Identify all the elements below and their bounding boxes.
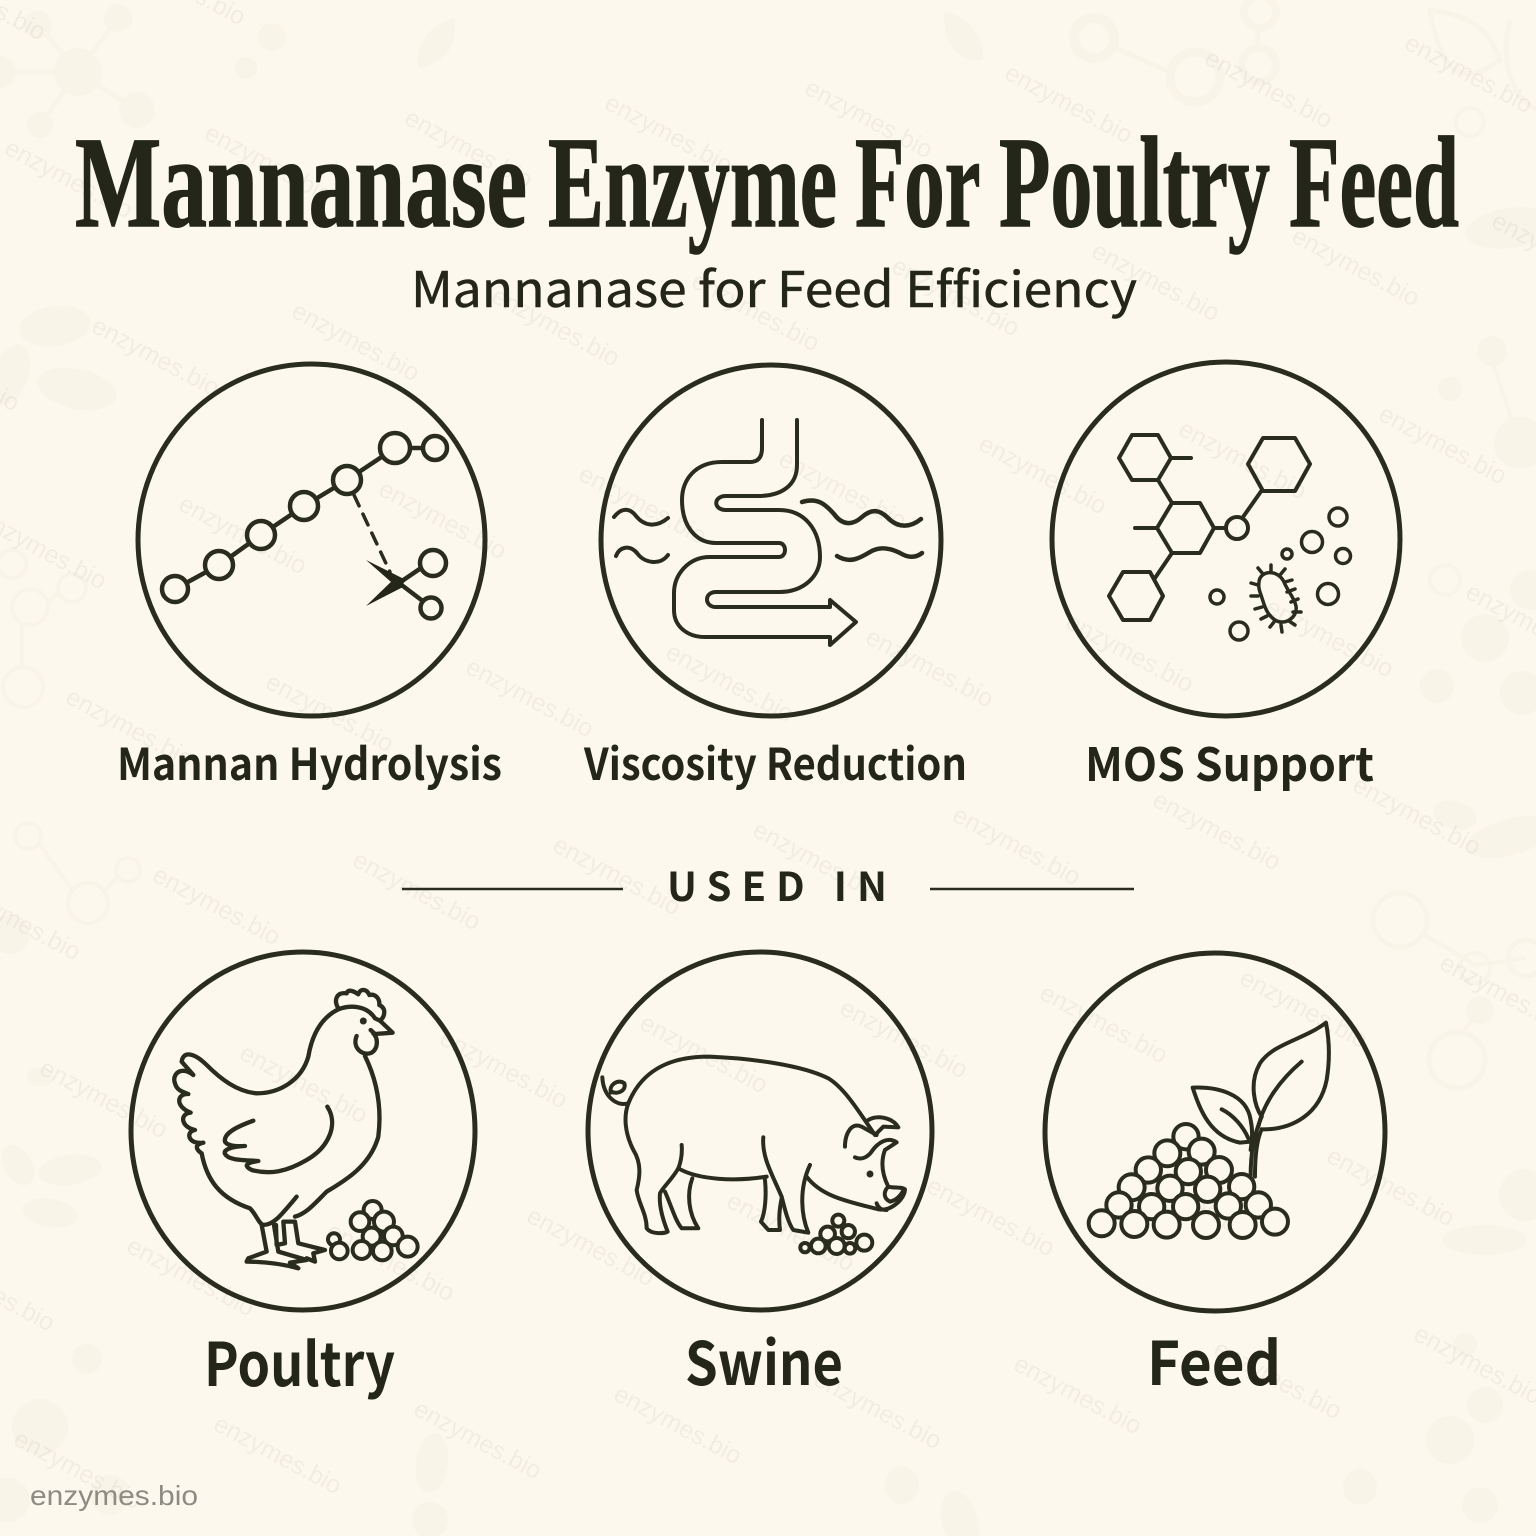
watermark pattern: enzymes.bio — [322, 1217, 459, 1307]
title: Mannanase — [75, 111, 527, 255]
watermark pattern: enzymes.bio — [0, 134, 137, 224]
watermark pattern: enzymes.bio — [348, 846, 485, 936]
icon: hen — [174, 990, 393, 1268]
watermark pattern: enzymes.bio — [1322, 1142, 1459, 1232]
icon: pig — [602, 1057, 905, 1233]
ring — [138, 364, 485, 716]
watermark pattern: enzymes.bio — [1287, 222, 1424, 312]
panel: poultry — [131, 952, 475, 1404]
watermark pattern: enzymes.bio — [400, 104, 537, 194]
watermark pattern: enzymes.bio — [600, 89, 737, 179]
watermark pattern: enzymes.bio — [1000, 59, 1137, 149]
watermark pattern: enzymes.bio — [548, 831, 685, 921]
ring — [1052, 362, 1400, 716]
watermark pattern: enzymes.bio — [748, 816, 885, 906]
watermark pattern: enzymes.bio — [861, 623, 998, 713]
icon: sprouting leaves — [1193, 1023, 1329, 1177]
watermark pattern: enzymes.bio — [522, 1202, 659, 1292]
watermark pattern: enzymes.bio — [35, 1054, 172, 1144]
watermark pattern: enzymes.bio — [61, 683, 198, 773]
panel: feed — [1045, 953, 1385, 1403]
watermark pattern: enzymes.bio — [1200, 44, 1337, 134]
watermark pattern: enzymes.bio — [974, 430, 1111, 520]
watermark pattern: enzymes.bio — [435, 1024, 572, 1114]
watermark pattern: enzymes.bio — [148, 861, 285, 951]
watermark pattern: enzymes.bio — [174, 490, 311, 580]
watermark pattern: enzymes.bio — [1035, 979, 1172, 1069]
watermark pattern: enzymes.bio — [1087, 237, 1224, 327]
watermark pattern: enzymes.bio — [1009, 1350, 1146, 1440]
watermark pattern: enzymes.bio — [887, 252, 1024, 342]
watermark pattern: enzymes.bio — [235, 1039, 372, 1129]
brand footer: enzymes.bio — [30, 1480, 198, 1511]
watermark pattern: enzymes.bio — [409, 1395, 546, 1485]
watermark pattern: enzymes.bio — [122, 1232, 259, 1322]
ring — [588, 952, 932, 1310]
watermark pattern: enzymes.bio — [1174, 415, 1311, 505]
watermark pattern: enzymes.bio — [722, 1187, 859, 1277]
label: Mannan Hydrolysis — [117, 729, 502, 793]
ring — [131, 952, 475, 1310]
watermark pattern: enzymes.bio — [948, 801, 1085, 891]
panel: MOS support — [1052, 362, 1400, 795]
watermark pattern: enzymes.bio — [1209, 1335, 1346, 1425]
watermark pattern: enzymes.bio — [922, 1172, 1059, 1262]
watermark pattern: enzymes.bio — [1400, 29, 1536, 119]
watermark pattern: enzymes.bio — [609, 1380, 746, 1470]
title: Enzyme — [548, 111, 837, 255]
label: Feed — [1147, 1316, 1281, 1403]
icon: pellet pile — [1089, 1124, 1288, 1238]
watermark pattern: enzymes.bio — [809, 1365, 946, 1455]
heading: USED IN — [667, 855, 887, 913]
subtitle: Mannanase for Feed Efficiency — [411, 251, 1137, 322]
watermark pattern: enzymes.bio — [574, 460, 711, 550]
label: Poultry — [204, 1317, 395, 1404]
watermark pattern: enzymes.bio — [1061, 608, 1198, 698]
watermark pattern: enzymes.bio — [687, 267, 824, 357]
watermark pattern: enzymes.bio — [661, 638, 798, 728]
title: Poultry — [999, 111, 1270, 255]
watermark pattern: enzymes.bio — [800, 74, 937, 164]
watermark pattern: enzymes.bio — [287, 297, 424, 387]
watermark pattern: enzymes.bio — [487, 282, 624, 372]
watermark pattern: enzymes.bio — [1235, 964, 1372, 1054]
label: MOS Support — [1085, 729, 1374, 795]
label: Viscosity Reduction — [583, 729, 967, 793]
icon: mannan chain with scissors — [162, 433, 447, 618]
icon: MOS molecule — [1109, 435, 1310, 620]
watermark pattern: enzymes.bio — [835, 994, 972, 1084]
icon: intestine with arrow — [674, 420, 856, 645]
watermark pattern: enzymes.bio — [774, 445, 911, 535]
watermark pattern: enzymes.bio — [261, 668, 398, 758]
watermark pattern: enzymes.bio — [374, 475, 511, 565]
title: For — [855, 111, 979, 255]
label: Swine — [685, 1316, 843, 1403]
watermark pattern: enzymes.bio — [1348, 771, 1485, 861]
panel: viscosity reduction — [583, 365, 967, 793]
watermark pattern: enzymes.bio — [9, 1425, 146, 1515]
ring — [1045, 953, 1385, 1311]
watermark pattern: enzymes.bio — [1148, 786, 1285, 876]
icon: feed pellets — [800, 1215, 872, 1254]
icon: viscosity waves — [614, 500, 922, 562]
watermark pattern: enzymes.bio — [1122, 1157, 1259, 1247]
watermark pattern: enzymes.bio — [200, 119, 337, 209]
watermark pattern: enzymes.bio — [635, 1009, 772, 1099]
panel: mannan hydrolysis — [117, 364, 502, 793]
panel: swine — [588, 952, 932, 1403]
icon: bacterium and prebiotic particles — [1210, 508, 1350, 640]
watermark pattern: enzymes.bio — [209, 1410, 346, 1500]
watermark pattern: enzymes.bio — [87, 312, 224, 402]
icon: feed pellets — [328, 1201, 418, 1260]
watermark pattern: enzymes.bio — [1374, 400, 1511, 490]
ring — [601, 365, 941, 716]
watermark pattern: enzymes.bio — [1261, 593, 1398, 683]
watermark pattern: enzymes.bio — [461, 653, 598, 743]
